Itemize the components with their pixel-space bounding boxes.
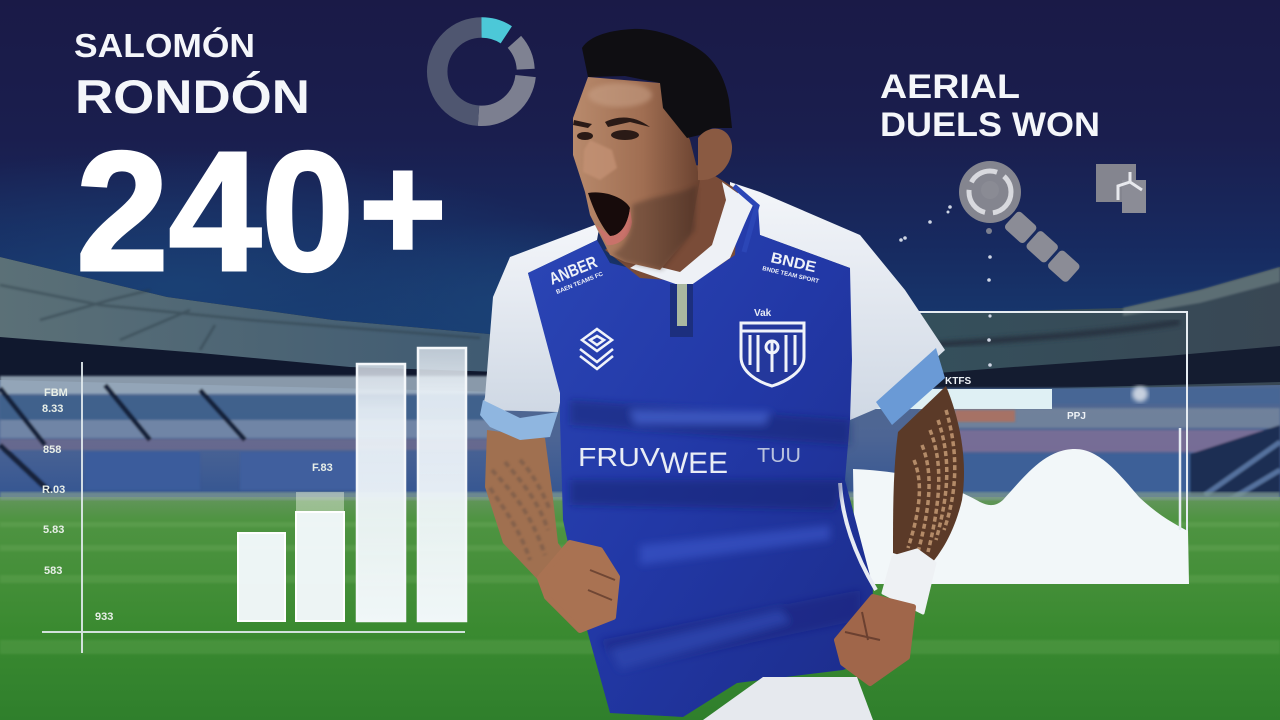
shoulder sponsor text: BNDE [769,249,818,276]
kit logo [580,329,613,369]
chart labels: KTFS [945,376,971,387]
beard shadow [612,185,697,270]
head [573,29,732,270]
dotted trail [899,205,992,367]
jersey blue body [528,205,873,717]
left arm [485,430,570,582]
bar 1 [238,533,285,621]
player name heading: SALOMÓN [74,27,255,64]
left arm tattoo [490,460,550,560]
horizontal stat bar [848,389,1052,409]
big stat number: + [359,124,447,292]
sponsor text: WEE [660,447,728,480]
face [573,77,700,270]
right forearm tattoo [908,410,955,552]
right fist [837,597,913,683]
inner line [1179,428,1181,530]
orange glow under stat bar [955,410,1015,422]
open mouth [588,192,630,236]
frame lines [915,312,1187,584]
axis labels: F.83 [312,462,333,474]
jersey right sleeve [730,182,945,420]
chart labels [945,376,1086,422]
ear [698,129,732,180]
shoulder sponsor text: BNDE TEAM SPORT [762,266,820,285]
axis labels: 858 [43,444,61,456]
jersey left sleeve [482,223,600,412]
sleeve cuffs [480,400,558,440]
player name heading: RONDÓN [75,70,310,123]
donut chart [437,27,526,116]
zip [670,284,693,337]
area chart [853,449,1189,584]
icon: magnifier with football [959,161,1081,283]
jersey fold shading [570,400,860,670]
shoulder sponsor text [546,249,820,296]
sponsor text [578,442,801,480]
shoulder sponsor text: ANBER [546,252,600,289]
nose [583,140,617,180]
axis labels: 583 [44,565,62,577]
axis labels: 933 [95,611,113,623]
aerial duels heading: DUELS WON [880,106,1100,144]
neck [605,165,738,282]
sponsor text: FRUV [578,442,661,472]
brows and eyes [573,118,650,140]
axis labels: 5.83 [43,524,64,536]
sponsor text: TUU [757,445,801,467]
forehead highlight [588,83,652,107]
hair [582,29,732,138]
player name heading [74,27,310,123]
jersey side white trim [840,483,876,590]
shoulder sponsor text: BAEN TEAMS FC [556,271,605,296]
club crest: Vak [754,308,772,319]
collar blue trim [734,186,757,252]
player [480,29,964,720]
axis lines [42,362,465,653]
right forearm [893,386,964,565]
bar 3 [357,364,405,621]
collar [630,182,753,288]
right wristband [883,550,935,613]
axis labels: 8.33 [42,403,63,415]
left bar chart [42,348,466,653]
axis labels: R.03 [42,484,65,496]
bar 4 [418,348,466,621]
big stat number: 240 [76,117,354,307]
background: stadium stands [0,257,1280,500]
shorts [703,677,873,720]
aerial duels heading [880,68,1100,144]
axis labels [42,387,333,623]
axis labels: FBM [44,387,68,399]
club crest [741,308,804,386]
left fist [540,543,617,630]
bar 2 [296,492,344,621]
right chart frame [848,312,1189,584]
aerial duels heading: AERIAL [880,68,1020,106]
icon: data squares [1096,164,1146,213]
background: football pitch [0,492,1280,720]
chart labels: PPJ [1067,411,1086,422]
